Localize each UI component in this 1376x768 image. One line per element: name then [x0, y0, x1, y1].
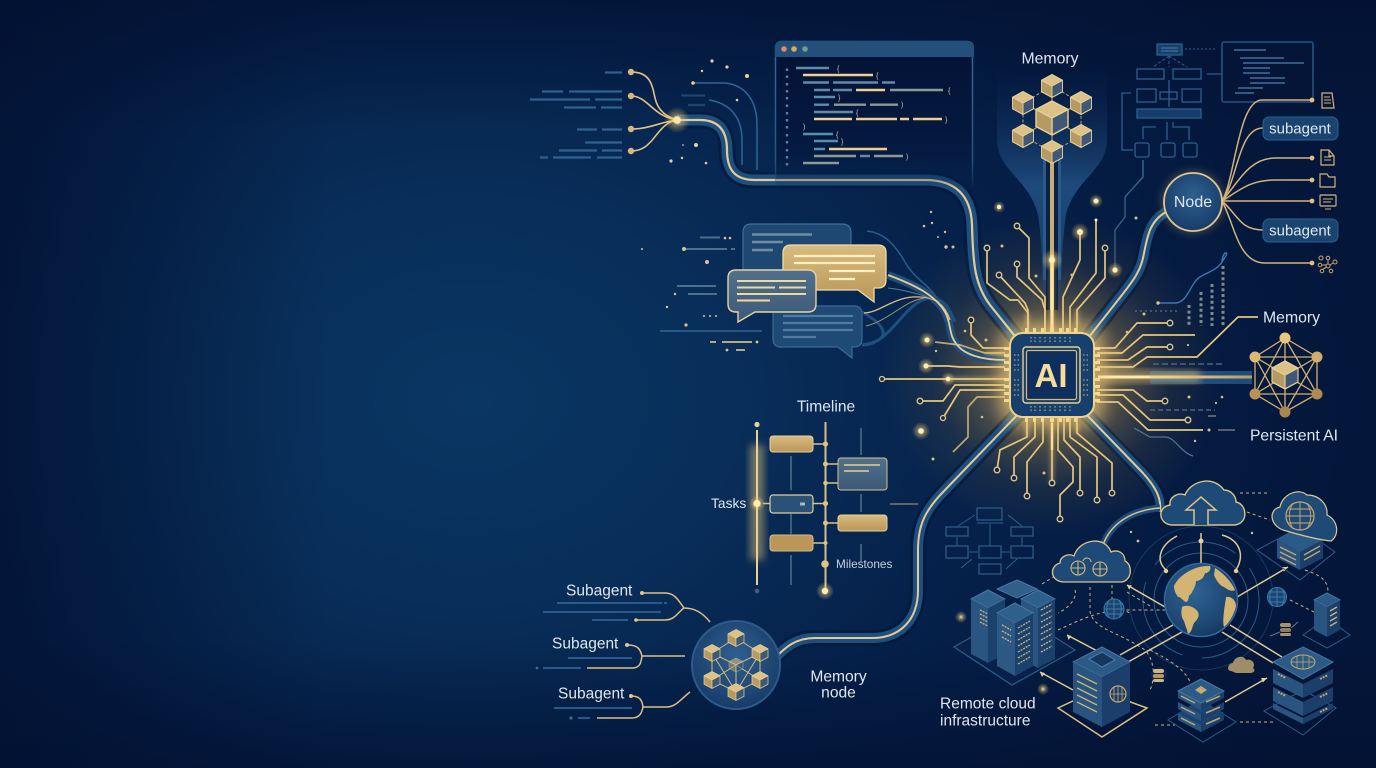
timeline heading: Timeline: [797, 398, 855, 416]
tasks glow bar: [749, 422, 765, 593]
arc ribbon: [1103, 508, 1160, 545]
chat dashes and dots: [641, 237, 762, 351]
panel: subagents and memory node: [536, 582, 867, 720]
code braces: }: [945, 117, 948, 124]
panel: timeline: [711, 398, 918, 600]
panel: memory top: [997, 50, 1107, 310]
panel: code window: [775, 41, 974, 190]
icon: folder: [1320, 174, 1335, 187]
bright node glows: [912, 194, 1123, 440]
chip label: AI: [1034, 357, 1068, 394]
memory node label: Memory: [810, 668, 867, 686]
memory label: Memory: [1263, 310, 1320, 326]
network icon: [1250, 332, 1322, 418]
flow diagram: [946, 508, 1033, 574]
right server stack: [1264, 647, 1336, 735]
tasks label: Tasks: [711, 496, 746, 511]
panel: node and subagents: [1085, 93, 1338, 342]
dim blue trace: [1115, 160, 1143, 270]
remote cloud label: [940, 696, 1036, 730]
circuit traces: [880, 160, 1258, 522]
chip pins: [1004, 328, 1100, 422]
small server stack: [1168, 679, 1236, 742]
connector: hub to chip tube: [677, 120, 1022, 345]
icon: glowing hub: [664, 107, 690, 133]
dim dashes near chip: [1134, 311, 1235, 456]
code braces: [803, 66, 951, 161]
fan connectors: [631, 72, 677, 151]
icon: document list: [1322, 93, 1334, 108]
fan end dots: [628, 69, 634, 154]
code braces: ): [803, 124, 805, 131]
arrow heads: [1040, 538, 1288, 682]
cloud: tools: [1052, 541, 1130, 582]
code braces: {: [836, 132, 839, 139]
code braces: }: [838, 95, 841, 102]
small database right: [1270, 622, 1298, 636]
chip micro circuitry: [1014, 337, 1090, 413]
milestones label: Milestones: [836, 557, 892, 571]
branch end dots: [1310, 98, 1314, 265]
connector dots: [625, 591, 644, 698]
pill: subagent lower: subagent: [1269, 222, 1332, 240]
data stream dashes: [530, 72, 705, 158]
panel: remote cloud infrastructure: [940, 481, 1350, 742]
globe orbit rings: [1129, 526, 1273, 670]
right small server: [1303, 593, 1350, 648]
central glow: [882, 215, 1222, 535]
subagent connectors: [587, 593, 710, 718]
memory node label: node: [821, 684, 856, 702]
bubble: back bottom: [773, 306, 862, 358]
dash dots: [536, 667, 573, 720]
memory node: [692, 621, 780, 709]
icon: monitor: [1320, 195, 1336, 209]
memory node label: [810, 668, 867, 702]
task bars: [770, 436, 887, 551]
icon: file: [1321, 150, 1334, 165]
arrows: [1040, 533, 1288, 702]
upper right server with cloud: [1257, 492, 1337, 580]
remote cloud label: infrastructure: [940, 712, 1030, 730]
trace glow: [948, 255, 1133, 483]
persistent AI label: Persistent AI: [1250, 428, 1338, 444]
chip body: [1010, 333, 1094, 417]
subagent dashes: [543, 603, 667, 718]
chart: mini bar dots: [1156, 253, 1227, 326]
subagent labels: [552, 582, 633, 702]
memory funnel: [997, 75, 1107, 300]
connector: node to chip tube: [1085, 212, 1166, 342]
code braces: ): [901, 102, 903, 109]
node circle: [1161, 170, 1225, 234]
timeline spine: [763, 422, 918, 600]
bubble: gold: [783, 245, 886, 302]
thin blue arcs: [693, 83, 757, 170]
left server cluster: [954, 580, 1075, 685]
globe: [1164, 564, 1238, 636]
connector: chat streams: [862, 231, 1005, 360]
icon: network cluster: [1318, 256, 1337, 273]
centre server on gold platform: [1058, 647, 1147, 737]
bubble: slate: [728, 270, 816, 322]
node branches: [1222, 100, 1312, 263]
cloud with globe: [1272, 492, 1337, 541]
code lines: [787, 68, 943, 166]
memory heading: Memory: [1021, 50, 1079, 68]
icon: AI chip: [1000, 323, 1104, 427]
small wire globes: [1104, 588, 1287, 619]
code braces: {: [876, 73, 879, 80]
ring terminals: [880, 223, 1191, 522]
dashed links: [1042, 493, 1328, 725]
subagent labels: Subagent: [558, 686, 625, 702]
small scatter dots: [923, 211, 1223, 475]
window controls: [781, 46, 808, 52]
connector: chip beam: [1098, 371, 1252, 384]
connector: lower tubes: [777, 410, 1160, 656]
icon: cube cluster: [1012, 74, 1092, 164]
continents: [1174, 566, 1236, 634]
code braces: {: [837, 66, 840, 73]
node circle: Node: [1174, 194, 1212, 211]
code braces: {: [948, 88, 951, 95]
small database: [1151, 667, 1167, 683]
panel: persistent AI memory: [1250, 310, 1338, 444]
pill: subagent upper: subagent: [1269, 120, 1332, 138]
subagent labels: Subagent: [566, 582, 633, 600]
traces: [882, 220, 1258, 517]
sparkle dots: [669, 59, 749, 164]
pill: subagent lower: [1263, 219, 1338, 242]
bright node cores: [918, 198, 1118, 434]
code braces: }: [841, 139, 844, 146]
small cloud blob: [1228, 657, 1254, 673]
pill: subagent upper: [1263, 117, 1338, 140]
window title bar: [775, 41, 974, 57]
funnel stem: [1043, 160, 1061, 310]
bubble: back top: [743, 224, 851, 270]
subagent labels: Subagent: [552, 636, 619, 652]
code braces: ): [906, 154, 908, 161]
chip inner square: [1023, 347, 1080, 403]
remote cloud label: Remote cloud: [940, 696, 1036, 712]
cloud: upload: [1161, 481, 1245, 525]
panel: org diagram: [1122, 42, 1313, 197]
panel: speech bubbles: [641, 224, 886, 358]
panel: top-left data fan: [530, 59, 757, 170]
code panel small: [1207, 42, 1313, 102]
code braces: {: [856, 110, 859, 117]
glowing specks: [955, 531, 1253, 695]
